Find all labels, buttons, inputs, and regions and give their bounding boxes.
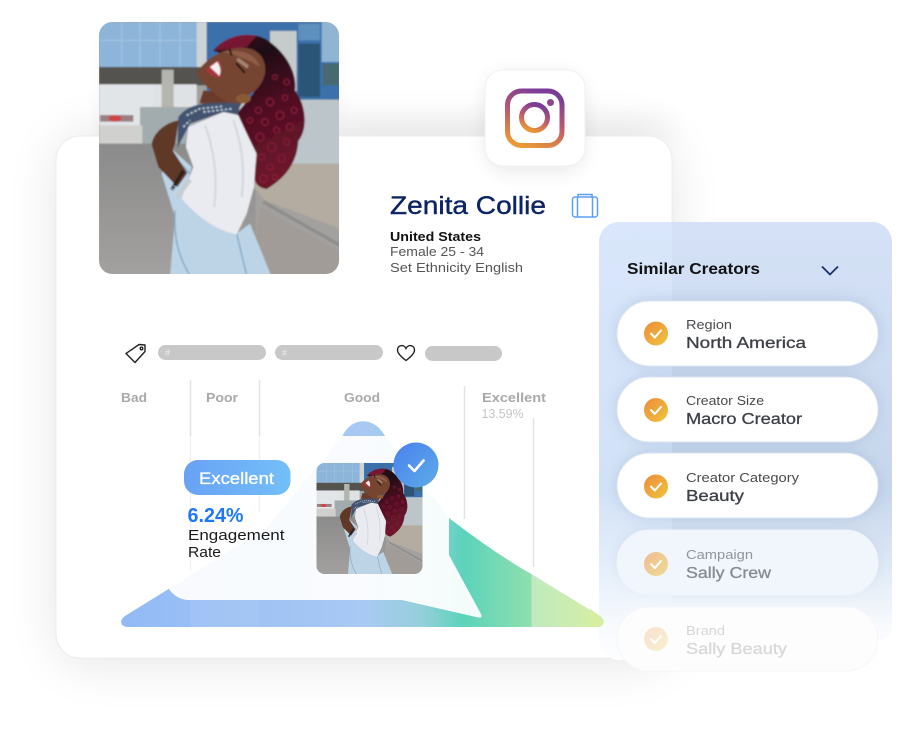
criterion: brand: Brand [686,623,725,638]
drop shadow: profile card [58,136,670,662]
criterion: campaign: Campaign [686,547,753,562]
creator details: Female 25 - 34 [390,244,484,259]
icon: heart [398,346,414,360]
creator name: Zenita Collie [390,192,546,220]
criterion: creator size: Macro Creator [686,411,803,428]
icon: chevron [822,266,838,274]
criterion: campaign: Sally Crew [686,565,771,582]
creator details: Set Ethnicity English [390,260,523,275]
icon: price tag [126,344,145,362]
criterion: creator category: Beauty [686,488,744,505]
callout: excellent engagement card [169,436,482,618]
chart labels: Excellent [482,390,547,405]
chart labels: 13.59% [482,406,524,421]
criterion: region [617,301,878,366]
creator details [390,229,523,275]
chart tip over panel [590,609,604,627]
icon: verified check [394,442,438,488]
interest pill [425,346,502,361]
chart: engagement distribution curve [121,421,604,627]
hashtag pill 2 [275,345,383,360]
creator details: United States [390,229,481,244]
tag row [126,344,502,362]
engagement rate value: 6.24% [188,505,244,527]
profile photo [90,10,357,277]
chart labels: Bad [121,390,147,405]
criterion: region: North America [686,335,806,352]
engagement rate label: Engagement [188,527,285,544]
criterion shadows [617,300,878,590]
icon: briefcase [572,194,598,217]
excellent badge [184,460,290,495]
hashtag pill 2: # [282,348,287,358]
drop shadow: profile photo [106,34,332,274]
criterion: region: Region [686,317,732,332]
chart labels: Good [344,390,380,405]
chart labels: Poor [206,390,238,405]
excellent badge: Excellent [199,469,274,488]
hashtag pill 1 [158,345,266,360]
panel: similar creators [590,222,892,671]
hashtag pill 1: # [165,348,170,358]
engagement rate label [188,527,285,561]
chart labels [121,390,547,421]
criterion: brand [617,607,878,671]
panel: profile card [56,136,672,658]
criterion: creator size [617,377,878,442]
criterion: creator category: Creator Category [686,470,800,485]
criterion: creator category [617,453,878,518]
thumbnail photo [316,463,422,574]
criterion: brand: Sally Beauty [686,641,787,658]
heading: Similar Creators [627,261,760,278]
criterion: campaign [617,530,878,595]
icon: instagram tile [485,70,585,170]
engagement rate label: Rate [188,544,221,561]
drop shadow: card top edge [340,122,672,136]
criterion: creator size: Creator Size [686,393,764,408]
